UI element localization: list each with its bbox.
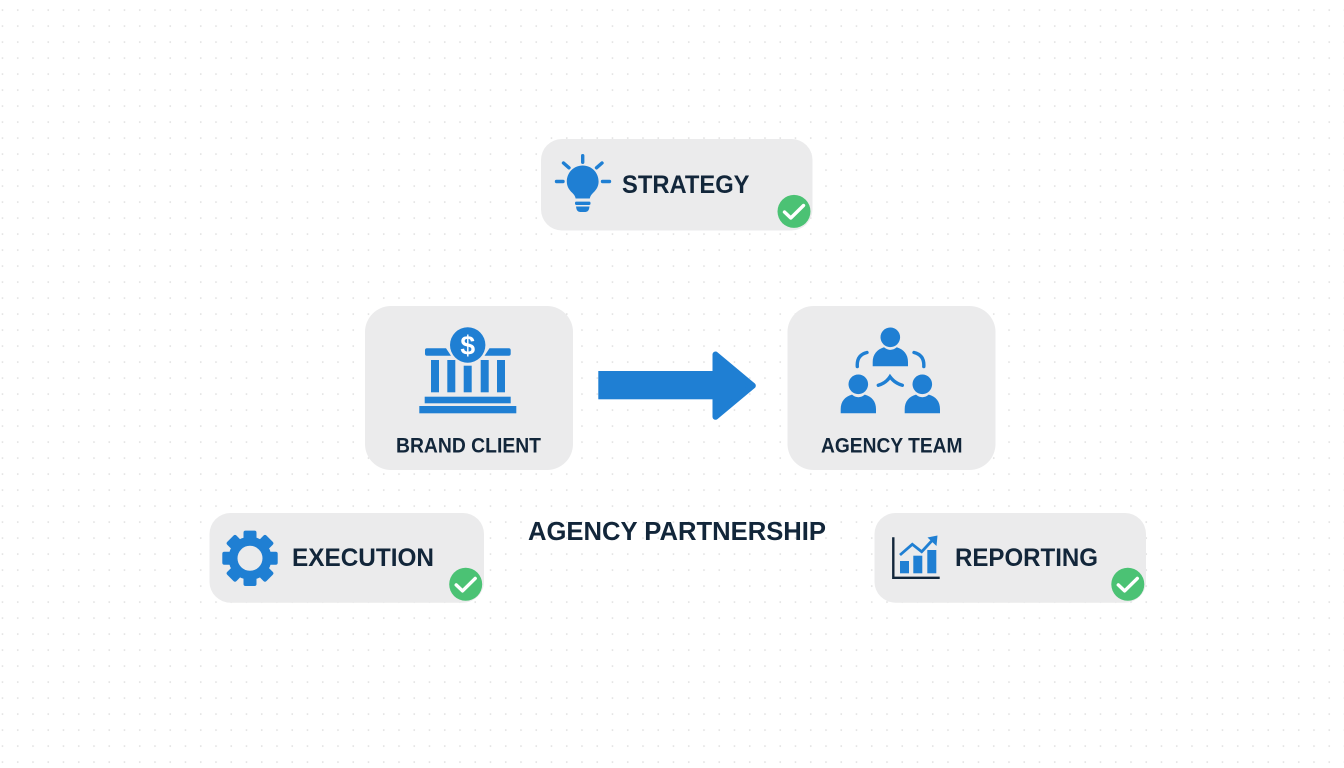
label: strategy: STRATEGY [622,171,750,199]
panel: execution [210,513,484,603]
label: brand client: BRAND CLIENT [396,435,541,458]
label: agency team: AGENCY TEAM [821,435,962,458]
badge: check [449,568,482,601]
badge: check [778,195,810,228]
icon: bank with dollar: $ [460,330,475,360]
panel: reporting [874,513,1146,603]
icon: team of three [841,328,940,413]
label: reporting: REPORTING [955,544,1098,572]
icon: growth chart [893,536,940,578]
icon: bank with dollar [419,326,516,413]
panel: strategy [541,139,812,230]
panel: agency team [788,306,996,470]
icon: light bulb [556,156,610,212]
panel: brand client [365,306,573,470]
icon: gear [222,531,278,586]
label: execution: EXECUTION [292,544,434,572]
chart title: agency partnership: AGENCY PARTNERSHIP [528,518,826,546]
badge: check [1111,568,1144,601]
arrow: brand client to agency team [598,354,753,417]
